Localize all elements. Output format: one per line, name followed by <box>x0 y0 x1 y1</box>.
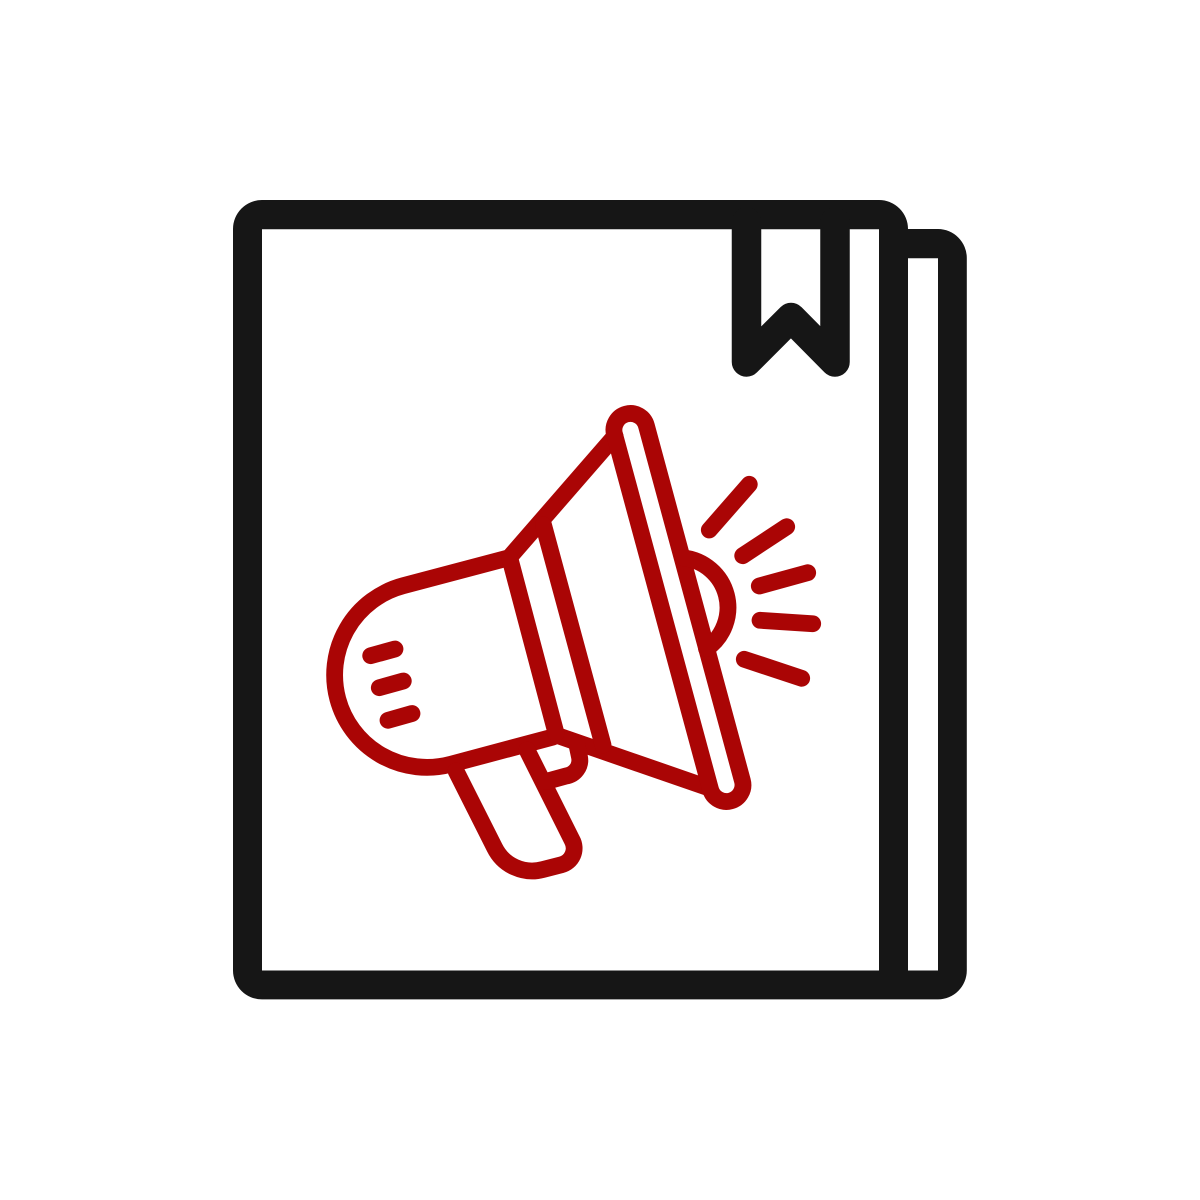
megaphone band lines <box>510 525 603 745</box>
megaphone vents <box>371 649 412 720</box>
icon: book <box>233 200 967 999</box>
megaphone front bell <box>683 558 728 649</box>
icon: megaphone <box>335 413 813 871</box>
book cover and back pages <box>233 200 967 999</box>
bookmark <box>746 222 835 362</box>
megaphone rear body <box>335 558 553 767</box>
megaphone trigger <box>546 745 580 782</box>
megaphone handle <box>456 750 574 871</box>
megaphone rim <box>614 413 743 802</box>
megaphone cone <box>512 436 709 788</box>
sound waves <box>709 484 813 678</box>
